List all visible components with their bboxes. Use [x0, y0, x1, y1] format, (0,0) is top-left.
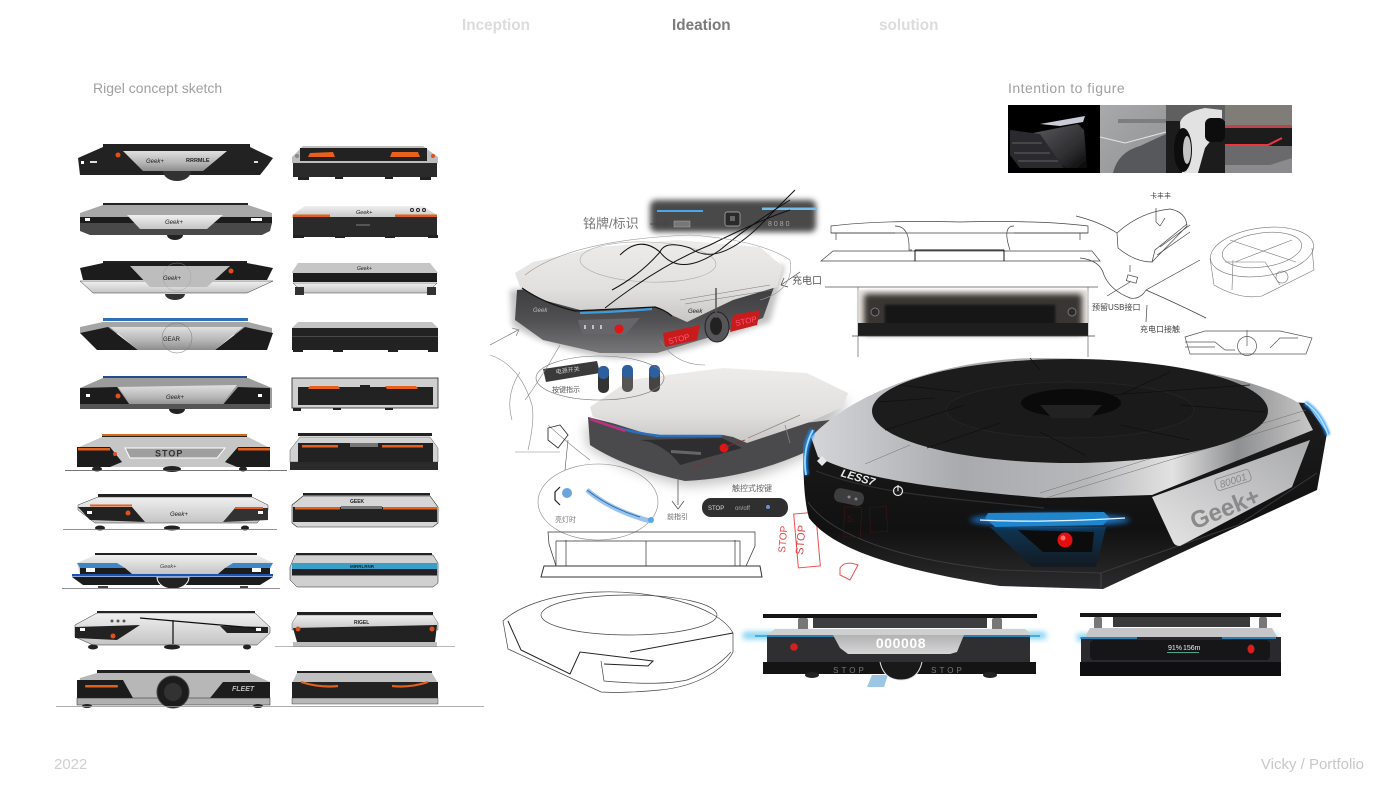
sketch: dark toolbar: 触控式按键: [732, 483, 772, 493]
sketch row 2 left: Geek+: [165, 220, 183, 226]
sketch: arrow and label: [667, 475, 688, 521]
footer: author: Vicky / Portfolio: [1261, 756, 1364, 773]
sketch: dark charge label: 按键指示: [552, 385, 580, 394]
blue edge glow: [743, 632, 1046, 639]
center wheel: [880, 662, 922, 680]
sketch: lower front view: [541, 532, 762, 577]
sketch row 9 right: RIGEL: [354, 620, 369, 626]
panel: rear render with status screen: [1077, 613, 1281, 676]
annotation: nameplate label: [583, 216, 668, 231]
panel: main concept sketch lower: [536, 356, 858, 580]
robot top disc: [872, 358, 1268, 463]
photo: red tail light: [1225, 105, 1292, 173]
panel: front-view line drawing: [821, 222, 1100, 261]
sketch row 10 right: [292, 671, 438, 704]
base with STOP labels: [763, 662, 1036, 675]
sketch row 6 left: STOP: [155, 448, 183, 458]
sketch: red STOP marks: STOP: [794, 525, 809, 555]
light lines: [755, 635, 1040, 637]
robot status icons and text: [817, 456, 902, 496]
sketch: dark toolbar: [702, 483, 788, 517]
sketch row 3 right: [292, 263, 438, 295]
sketch row 3 right: Geek+: [357, 266, 372, 272]
sketch robot one body: [510, 240, 785, 358]
base with STOP labels: STOP: [833, 666, 867, 675]
sketch: left wing lines: [490, 345, 590, 460]
robot lower black body: [804, 390, 1327, 589]
sketch row 9 right: [275, 612, 455, 647]
sketch: dark toolbar: on/off: [735, 506, 750, 512]
feet: [805, 672, 997, 678]
sketch row 3 left: Geek+: [163, 276, 181, 282]
vehicle number: 000008: [876, 635, 926, 651]
footer: year: 2022: [54, 756, 87, 773]
robot faint sketch overlay marks: S: [847, 514, 853, 524]
sketch row 10 left: [56, 670, 484, 708]
sketch row 6 left: [65, 434, 287, 472]
screen distance value: 156m: [1183, 645, 1201, 652]
sketch robot one body: Geek: [688, 309, 703, 315]
sketch robot one body: Geek: [533, 308, 548, 314]
sketch row 8 left: Geek+: [160, 564, 177, 570]
sketch: light strip detail: 亮灯时: [555, 515, 576, 524]
image strip: intention reference photos: [1008, 105, 1292, 173]
heading: Intention to figure: Intention to figure: [1008, 80, 1125, 96]
sketch: arrow and label: 前指引: [667, 512, 688, 521]
annotation: charge port label: [781, 272, 822, 287]
sketch row 7 right: [292, 493, 438, 527]
nav item: Ideation: Ideation: [672, 17, 731, 34]
base with STOP labels: STOP: [931, 666, 965, 675]
sketch row 2 left: [80, 203, 272, 240]
sketch: rear bar render: 8080: [768, 221, 792, 228]
lift posts: [798, 618, 1002, 630]
robot front recess and emergency stop: [990, 527, 1106, 567]
robot faint sketch overlay marks: [843, 507, 888, 537]
base: [1080, 662, 1281, 676]
sketch row 4 right: [292, 322, 438, 352]
sketch: light strip detail: [538, 464, 658, 540]
sketch: dark charge label: 电源开关: [555, 365, 580, 376]
sketch row 8 right: MIRRLRNR: [350, 564, 375, 569]
sketch: dark toolbar: STOP: [708, 506, 724, 512]
sketch row 7 right: GEEK: [350, 499, 365, 505]
photo: car front headlight: [1008, 105, 1100, 173]
panel: rendered front section: [825, 287, 1098, 357]
sketch row 3 left: [80, 261, 273, 300]
dark body: [1081, 637, 1281, 662]
top plate: [1080, 613, 1281, 617]
sketch: pentagon icon: [548, 425, 568, 470]
robot blue light front: [970, 512, 1130, 527]
robot blue light right: [1305, 403, 1328, 435]
sketch row 5 right: [292, 378, 438, 411]
dark body: [767, 635, 1030, 662]
serial number plate: 80001: [1219, 472, 1248, 491]
panel: concept sketch thumbnail grid: [56, 144, 484, 708]
sketch: red STOP marks: STOP: [777, 525, 790, 553]
navigation: section headings: [462, 17, 938, 34]
sketch row 7 left: Geek+: [170, 512, 188, 518]
red stop button: [790, 643, 798, 651]
sketch robot one body: STOP: [667, 332, 691, 346]
sketch row 1 left: Geek+: [146, 159, 164, 165]
sketch: small module with arrows: 卡丰丰: [1150, 191, 1171, 200]
panel: main concept sketch upper: [490, 190, 822, 460]
serial number plate: [1214, 469, 1252, 492]
sketch: rear bar render: [650, 200, 817, 232]
sketch: small module with arrows: [1076, 191, 1206, 334]
posts: [1094, 617, 1267, 629]
robot Geek+ side panel: [1152, 440, 1310, 546]
center number panel: [833, 635, 964, 654]
mount plate: [763, 614, 1037, 618]
sketch: small module with arrows: 充电口接触: [1140, 324, 1180, 334]
sketch row 2 right: Geek+: [356, 210, 373, 216]
sketch row 5 left: Geek+: [166, 395, 184, 401]
robot side switch: [833, 487, 865, 507]
annotation: bottom callout: 按钮指示灯位置: [695, 375, 744, 384]
photo: concept car wheel: [1166, 105, 1225, 173]
sketch scribble overlay: [490, 190, 795, 345]
sketch: small module with arrows: 预留USB接口: [1092, 302, 1140, 312]
panel: front render with number plate: [743, 614, 1046, 687]
main rendered robot: [804, 358, 1328, 589]
light lines: [1080, 637, 1276, 639]
sketch: quick annotation drawings: [1076, 191, 1317, 356]
robot blue light left: [805, 430, 813, 475]
robot status icons and text: LESS7: [839, 468, 877, 489]
sketch row 7 left: [63, 494, 277, 530]
sketch: dark charge label: [543, 361, 600, 394]
status screen values: 91%: [1168, 645, 1182, 652]
sketch row 5 left: [80, 376, 272, 414]
sketch row 8 right: [290, 553, 438, 587]
sketch: switch pills: [536, 356, 664, 400]
sketch row 1 left: RRRMLE: [186, 158, 210, 164]
screen underline: [1167, 651, 1199, 654]
sketch row 8 left: [62, 553, 280, 589]
heading: Rigel concept sketch: Rigel concept sketch: [93, 80, 222, 96]
sketch row 1 right: [292, 146, 438, 180]
nav item: solution: solution: [879, 17, 938, 34]
sketch row 9 left: [75, 611, 270, 650]
sketch row 6 right: [290, 433, 438, 470]
sketch row 1 left: [78, 144, 273, 181]
sketch row 2 right: [292, 206, 438, 238]
sketch: small side view: [1185, 330, 1312, 356]
blue floor strip: [867, 675, 888, 687]
sketch row 10 left: FLEET: [232, 686, 255, 693]
robot silver shell: [811, 358, 1313, 498]
annotation: nameplate label: 铭牌/标识: [583, 216, 639, 231]
sketch row 4 left: [80, 318, 273, 353]
annotation: charge port label: 充电口: [792, 274, 822, 287]
sketch: round robot perspective: [1207, 221, 1317, 297]
annotation: bottom callout: [660, 340, 744, 384]
top silver plate: [767, 629, 1032, 635]
sketch robot one body: STOP: [735, 315, 758, 328]
sketch robot two body: [585, 368, 850, 486]
sketch: red STOP marks: [777, 512, 858, 580]
silver top: [1085, 628, 1277, 637]
sketch row 4 left: GEAR: [163, 337, 181, 343]
panel: bottom line sketch: [503, 592, 733, 692]
photo: silver body surface: [1100, 105, 1166, 173]
rear red dot: [1248, 644, 1254, 654]
brand wordmark Geek+: Geek+: [1186, 483, 1264, 535]
nav item: Inception: Inception: [462, 17, 530, 34]
